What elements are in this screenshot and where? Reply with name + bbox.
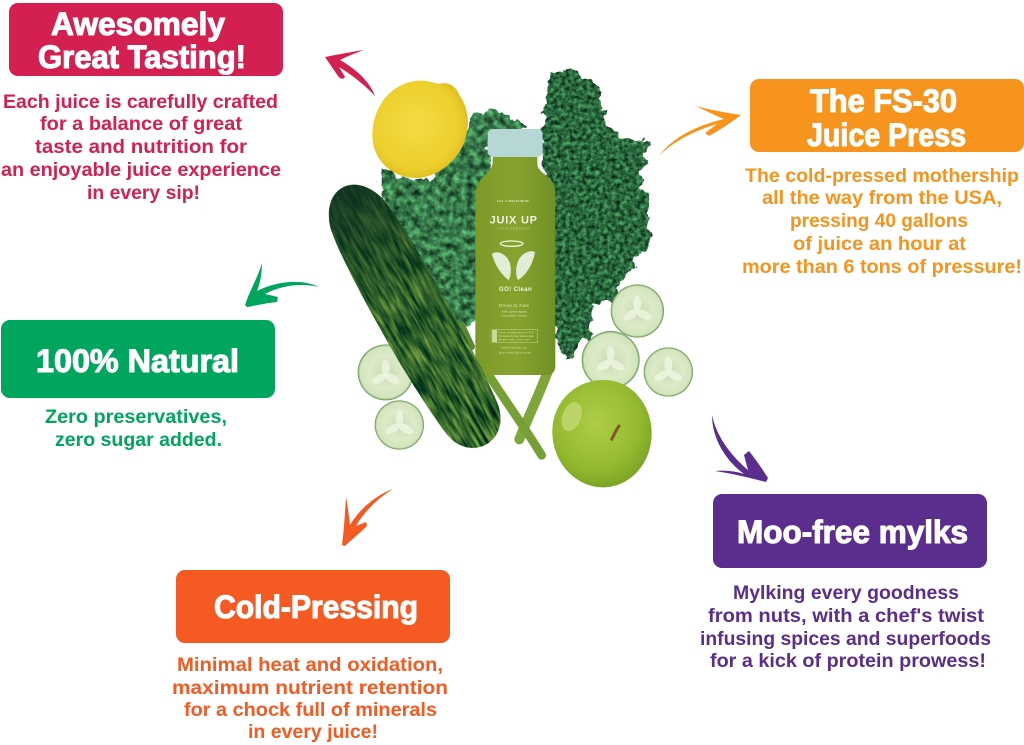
heading box: cold-pressing [176, 570, 450, 643]
bottle: cucumber, lemon [502, 313, 528, 317]
arrow: crimson [325, 50, 375, 96]
celery stalks [462, 325, 548, 455]
cucumber slice: lower left [358, 344, 414, 400]
text block: taste description [1, 92, 281, 204]
text block: press description [742, 166, 1022, 278]
text block: natural description: Zero preservatives, [45, 407, 227, 428]
heading box: FS-30 juice press [750, 79, 1024, 153]
arrow: orange [659, 106, 741, 156]
text block: taste description: for a balance of great [40, 114, 243, 135]
text block: taste description: Each juice is carefully crafted [3, 92, 278, 113]
text block: press description: pressing 40 gallons [790, 211, 968, 232]
text block: press description: more than 6 tons of pressure! [742, 257, 1022, 278]
text block: press description: all the way from the USA, [762, 188, 1002, 209]
panel: FS-30 juice press [742, 79, 1024, 278]
text block: mylks description: from nuts, with a chef's twist [708, 606, 985, 627]
lemon [372, 81, 468, 178]
text block: cold-pressing description [172, 655, 448, 743]
bottle: GO! Clean [499, 287, 532, 293]
cucumber slice: far right [644, 347, 693, 397]
bottle: Consume by best before date [499, 335, 534, 338]
heading box: moo-free mylks: Moo-free mylks [737, 514, 968, 550]
bottle [475, 129, 555, 375]
text block: mylks description: Mylking every goodness [733, 583, 959, 604]
text block: cold-pressing description: in every juice! [248, 722, 378, 743]
text block: press description: The cold-pressed mothership [745, 166, 1019, 187]
text block: mylks description: infusing spices and superfoods [700, 629, 991, 650]
bottle: @juixupsg @juixupsg [499, 353, 531, 355]
text block: cold-pressing description: maximum nutrient retention [172, 678, 448, 699]
text block: taste description: in every sip! [87, 183, 200, 204]
text block: press description: of juice an hour at [793, 234, 967, 255]
text block: natural description: zero sugar added. [55, 430, 222, 451]
text block: taste description: taste and nutrition for [35, 137, 248, 158]
panel: cold-pressing [172, 570, 450, 743]
text block: mylks description: for a kick of protein prowess! [710, 651, 986, 672]
heading box: awesomely great tasting: Great Tasting! [38, 39, 246, 75]
heading box: 100% natural: 100% Natural [36, 343, 239, 379]
bottle: COLD PRESSED [497, 226, 530, 230]
bottle: JUIX UP [490, 214, 537, 226]
text block: taste description: an enjoyable juice experience [1, 160, 281, 181]
bottle: kale, green apple, [502, 309, 527, 313]
heading box: cold-pressing: Cold-Pressing [214, 589, 418, 625]
kale: right bunch [540, 68, 652, 360]
arrow: orange-red [342, 489, 393, 546]
cucumber slice: right middle [582, 331, 640, 389]
heading box: awesomely great tasting: Awesomely [51, 6, 225, 42]
bottle: Dress to Kale [499, 303, 530, 308]
heading box: FS-30 juice press: Juice Press [807, 117, 966, 153]
kale: left bunch [378, 110, 527, 333]
arrow: purple [712, 415, 768, 482]
bottle: Keep refrigerated at 4°C [499, 332, 534, 335]
text block: cold-pressing description: for a chock full of minerals [184, 700, 437, 721]
heading box: awesomely great tasting [9, 3, 283, 76]
heading box: FS-30 juice press: The FS-30 [810, 83, 957, 119]
bottle: www.juixup.sg [502, 345, 527, 349]
panel: 100% natural [1, 320, 275, 451]
text block: natural description [45, 407, 227, 451]
cucumber slice: bottom [375, 400, 424, 450]
heading box: moo-free mylks [713, 494, 987, 568]
arrow: green [245, 263, 319, 307]
panel: awesomely great tasting [1, 3, 283, 204]
text block: mylks description [700, 583, 991, 672]
apple [552, 380, 652, 487]
cucumber slice: right upper [611, 284, 664, 338]
panel: moo-free mylks [700, 494, 991, 672]
cucumber [311, 171, 517, 462]
photo: bottle with kale, lemon, cucumber and apple [311, 68, 693, 487]
bottle: Shake well and chill [499, 339, 531, 341]
text block: cold-pressing description: Minimal heat and oxidation, [177, 655, 443, 676]
heading box: 100% natural [1, 320, 275, 398]
bottle: Life is DELICIOUS! [497, 199, 529, 203]
